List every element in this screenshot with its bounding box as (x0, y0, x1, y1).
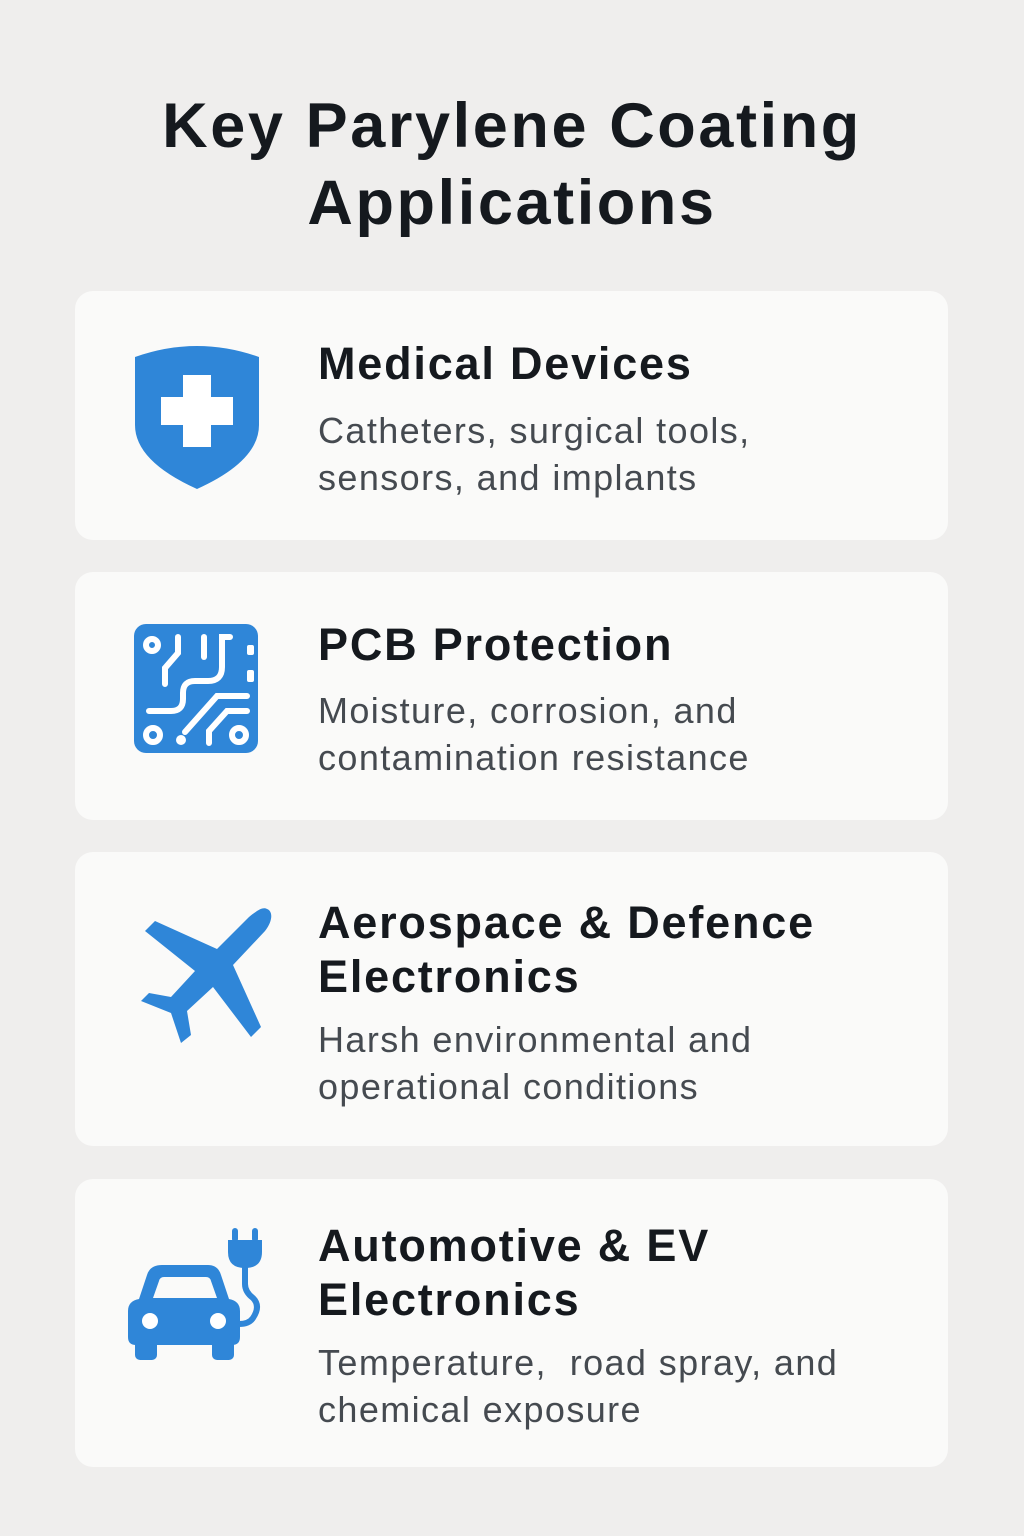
heading: PCB Protection (318, 619, 673, 670)
heading: Aerospace & Defence (318, 897, 815, 948)
panel: pcb protection (75, 572, 948, 820)
description (318, 1342, 838, 1430)
description: Temperature, road spray, and (318, 1342, 838, 1383)
description: sensors, and implants (318, 457, 698, 498)
icon: circuit board (134, 624, 258, 753)
icon: airplane (141, 908, 272, 1043)
description: Moisture, corrosion, and (318, 690, 738, 731)
icon: shield with cross (135, 346, 259, 489)
description: Harsh environmental and (318, 1019, 752, 1060)
description: contamination resistance (318, 737, 750, 778)
description: chemical exposure (318, 1389, 642, 1430)
heading: Electronics (318, 951, 580, 1002)
icon: electric car (128, 1228, 262, 1360)
heading: Electronics (318, 1274, 580, 1325)
description (318, 1019, 752, 1107)
description (318, 410, 751, 498)
panel: medical devices (75, 291, 948, 540)
title (162, 91, 862, 238)
panel: automotive (75, 1179, 948, 1467)
heading: Medical Devices (318, 338, 693, 389)
description: operational conditions (318, 1066, 699, 1107)
heading: Automotive & EV (318, 1220, 710, 1271)
panel: aerospace (75, 852, 948, 1146)
description (318, 690, 750, 778)
title: Applications (307, 168, 717, 238)
description: Catheters, surgical tools, (318, 410, 751, 451)
heading (318, 897, 815, 1002)
title: Key Parylene Coating (162, 91, 862, 161)
heading (318, 1220, 710, 1325)
